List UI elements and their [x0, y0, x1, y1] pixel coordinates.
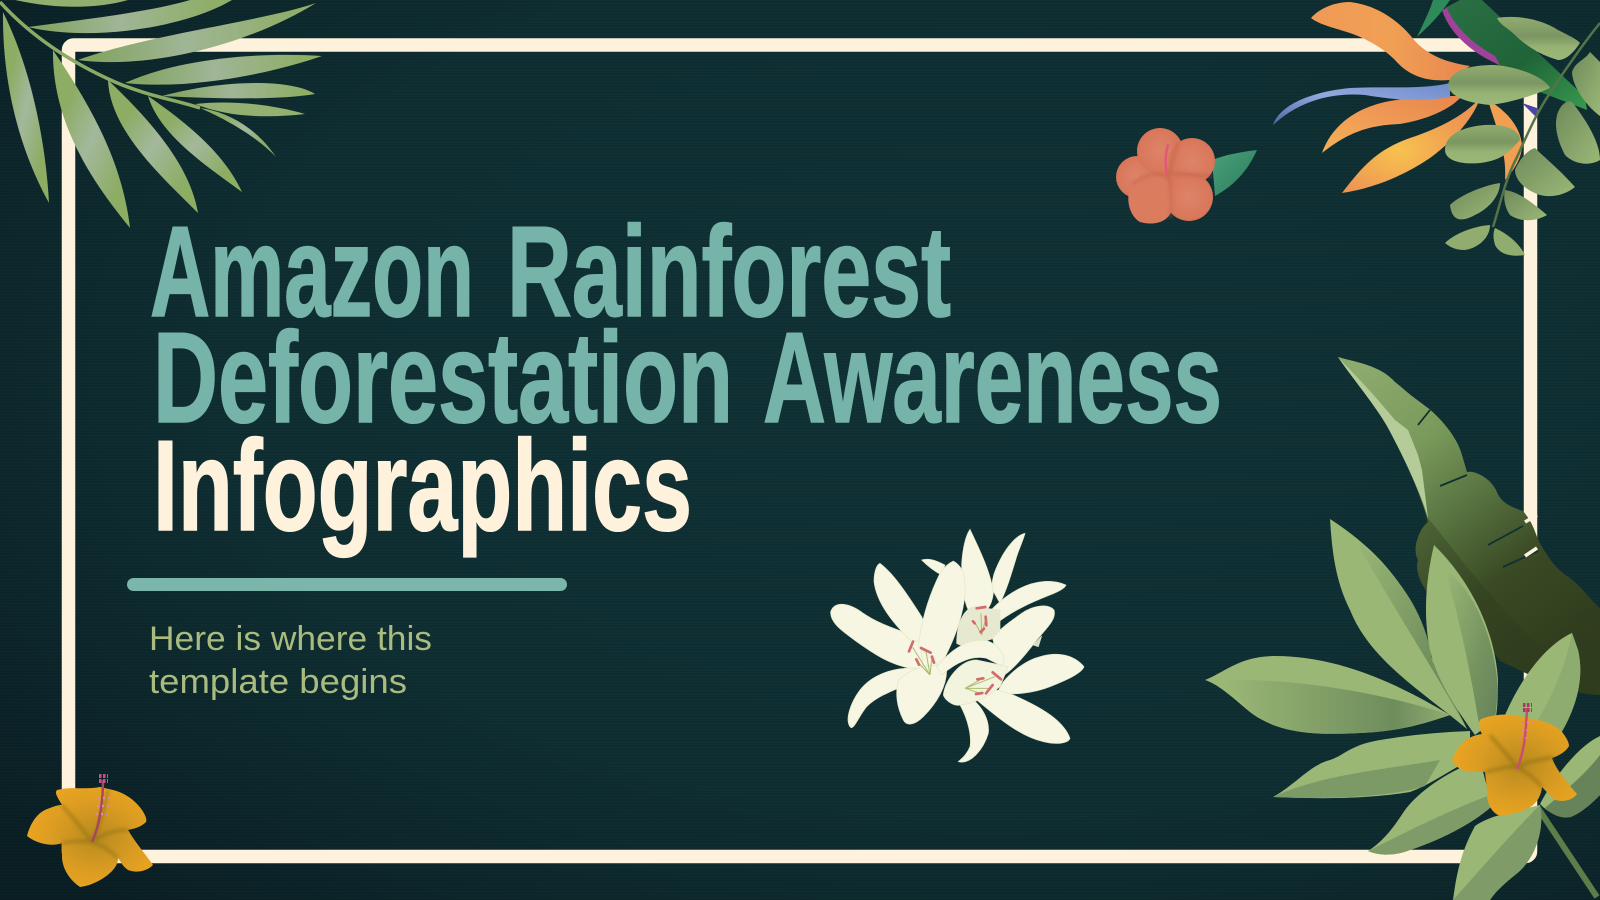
title [150, 200, 1222, 558]
banana leaf lower half shade [1416, 518, 1600, 695]
leaf lower middle [1368, 760, 1492, 855]
stem [1538, 808, 1597, 897]
banana leaf bottom right [1338, 357, 1600, 695]
stamen [1517, 705, 1533, 769]
bird of paradise flower top right [1273, 0, 1600, 256]
white lily cluster [831, 529, 1084, 762]
orange petal top [1311, 2, 1470, 80]
leaf upper right [1505, 633, 1580, 735]
subtitle [149, 620, 432, 701]
palm branch top left [0, 0, 322, 228]
stamen [92, 776, 110, 842]
title: Amazon [150, 200, 474, 344]
frame glimpses [1525, 515, 1537, 556]
title: Awareness [763, 306, 1222, 450]
light inner strip [1338, 357, 1428, 518]
sprig stem [1493, 23, 1600, 227]
green leaf [1212, 150, 1257, 196]
leaf long left [1205, 656, 1450, 734]
orange hibiscus bottom right [1452, 705, 1577, 815]
dark green stalk [1445, 0, 1587, 110]
green foliage bottom right [1205, 519, 1600, 900]
leaf upper centre [1426, 545, 1498, 735]
dark blue tip [1522, 103, 1537, 118]
red hibiscus flower [1116, 128, 1257, 224]
leaf upper left [1330, 519, 1467, 729]
lily upper [922, 529, 1066, 677]
orange hibiscus bottom left [27, 776, 153, 887]
lily lower right [943, 654, 1084, 762]
sprig leaves [1497, 17, 1580, 60]
subtitle: Here is where this [149, 620, 432, 658]
orange petal right [1488, 100, 1522, 180]
thin green leaf [1417, 0, 1450, 37]
purple sheath edge [1442, 8, 1500, 65]
subtitle: template begins [149, 663, 407, 701]
title: Deforestation [153, 306, 733, 450]
big leaf [1448, 65, 1550, 105]
orange petal lower [1342, 98, 1480, 193]
lily left front [831, 561, 1004, 728]
orange petal middle [1322, 96, 1462, 153]
blue petal [1273, 83, 1450, 125]
title: Rainforest [507, 200, 951, 344]
leaf right [1540, 736, 1600, 818]
title: Infographics [153, 414, 692, 558]
leaf bottom [1453, 805, 1541, 900]
title underline bar [127, 578, 567, 591]
leaf lower left [1273, 731, 1470, 798]
